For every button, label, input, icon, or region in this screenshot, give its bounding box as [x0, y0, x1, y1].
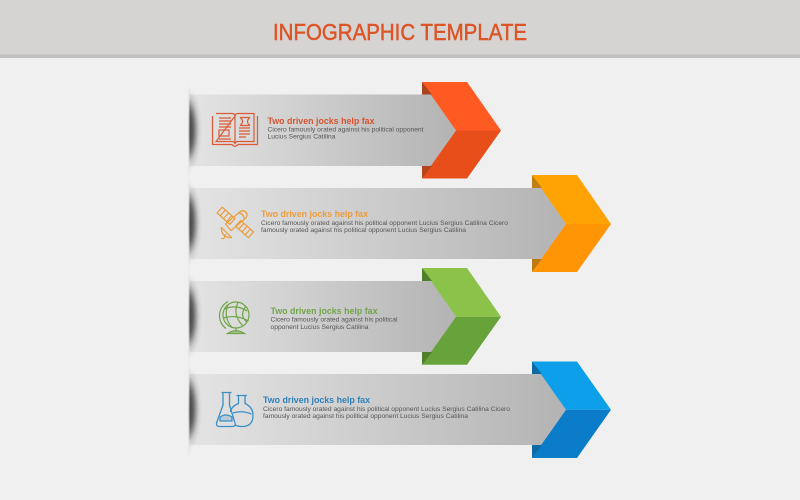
text block 4	[263, 395, 510, 420]
text block 2: Two driven jocks help fax	[261, 209, 368, 219]
text block 2: Cicero famously orated against his political opponent Lucius Sergius Catilina Cicero	[261, 220, 508, 227]
panel: arrow 2 amber satellite	[180, 175, 611, 272]
text block 1	[268, 116, 424, 141]
icon: open book	[212, 114, 258, 146]
bar 2 left edge shadow	[188, 181, 200, 266]
text block 1: Two driven jocks help fax	[268, 116, 374, 126]
text block 2: famously orated against his political opponent Lucius Sergius Catilina	[261, 227, 466, 234]
chevron 4	[532, 362, 611, 458]
ribbon bar 1	[190, 94, 456, 166]
panel: arrow 1 orange-red book	[180, 82, 501, 179]
text block 3	[270, 306, 398, 331]
bar 3 left edge shadow	[188, 274, 200, 360]
chevron 3	[422, 268, 501, 365]
chevron 2	[532, 175, 611, 272]
text block 3: Cicero famously orated against his political	[270, 317, 398, 324]
icon: satellite	[217, 207, 254, 239]
icon: flasks	[216, 392, 253, 426]
text block 1: Lucius Sergius Catilina	[268, 134, 336, 141]
text block 1: Cicero famously orated against his political opponent	[268, 127, 424, 134]
text block 4: famously orated against his political opponent Lucius Sergius Catilina	[263, 413, 468, 420]
bar 1 left edge shadow	[188, 88, 200, 174]
ribbon bar 2	[190, 188, 566, 259]
text block 4: Two driven jocks help fax	[263, 395, 370, 405]
header band	[0, 0, 800, 58]
text block 3: Two driven jocks help fax	[270, 306, 378, 316]
ribbon bar 3	[190, 281, 456, 352]
title: INFOGRAPHIC TEMPLATE	[273, 19, 527, 45]
text block 3: opponent Lucius Sergius Catilina	[270, 324, 369, 331]
icon: globe	[220, 302, 249, 334]
bar 4 left edge shadow	[188, 368, 200, 454]
ribbon bar 4	[190, 374, 566, 445]
text block 2	[261, 209, 508, 234]
panel: arrow 4 blue flasks	[180, 362, 611, 459]
chevron 1	[422, 82, 501, 178]
text block 4: Cicero famously orated against his political opponent Lucius Sergius Catilina Cicero	[263, 406, 510, 413]
panel: arrow 3 green globe	[180, 268, 501, 365]
